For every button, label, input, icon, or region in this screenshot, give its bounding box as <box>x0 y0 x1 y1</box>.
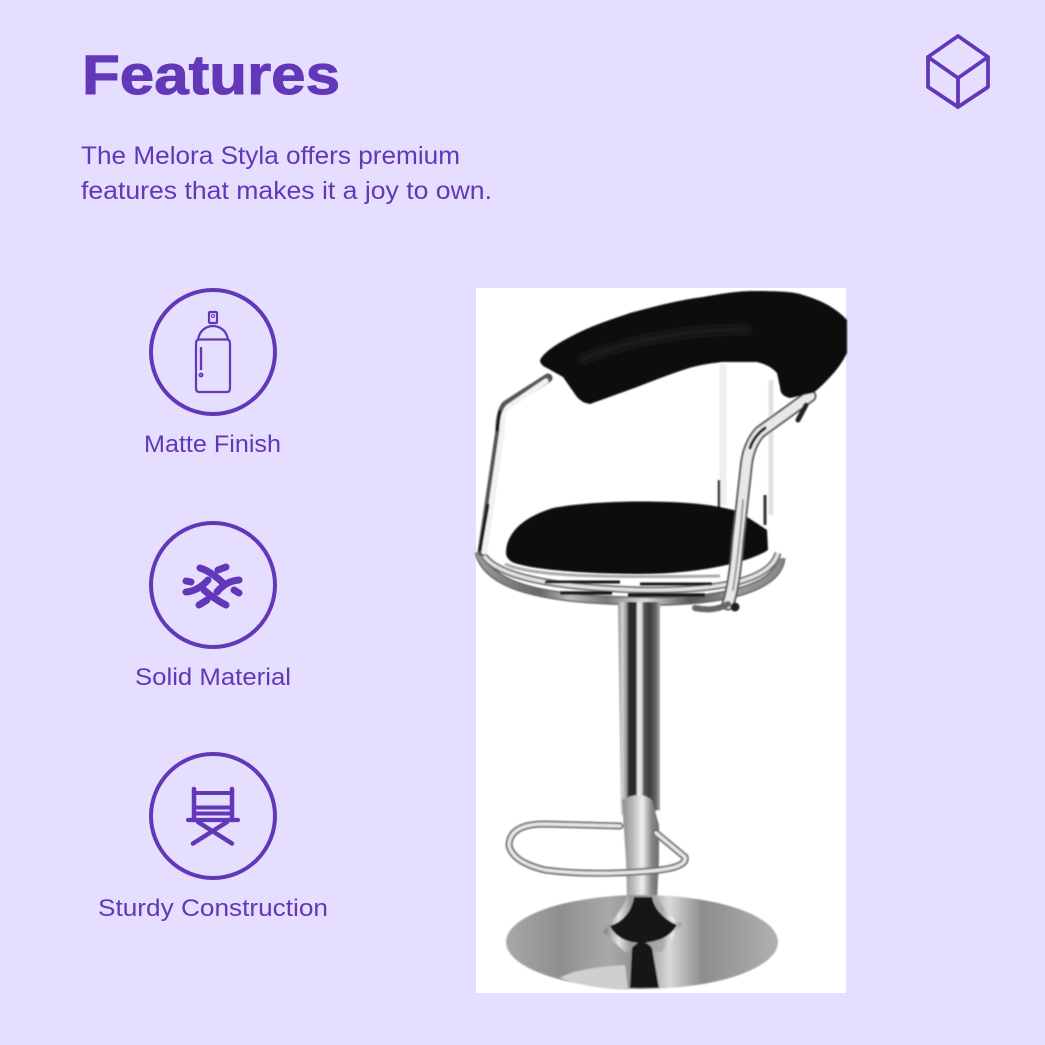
lower pole <box>622 795 659 900</box>
title: Features <box>82 43 340 106</box>
icon: cube <box>928 36 988 107</box>
icon: folding chair <box>151 754 275 878</box>
icon: woven fabric <box>151 523 275 647</box>
feature: matte finish <box>144 290 281 458</box>
feature: sturdy construction <box>98 754 328 922</box>
intro text <box>81 142 492 205</box>
base highlight <box>560 965 628 990</box>
intro text: features that makes it a joy to own. <box>81 177 492 205</box>
product photo: bar stool <box>476 288 847 993</box>
icon: spray can <box>151 290 275 414</box>
label: sturdy construction: Sturdy Construction <box>98 895 328 922</box>
feature: solid material <box>135 523 291 691</box>
cone shadow <box>610 897 677 943</box>
central pole <box>618 602 660 815</box>
round base <box>506 895 778 989</box>
lower base column <box>630 942 659 988</box>
footrest ring <box>509 824 685 873</box>
left armrest tube <box>480 378 548 552</box>
label: matte finish: Matte Finish <box>144 431 281 458</box>
seat ring <box>479 552 781 601</box>
back support tubes <box>719 364 771 525</box>
base cone <box>603 896 682 952</box>
seat cushion <box>506 501 768 574</box>
backrest cushion <box>540 291 847 404</box>
intro text: The Melora Styla offers premium <box>81 142 460 170</box>
label: solid material: Solid Material <box>135 664 291 691</box>
right armrest tube <box>695 396 810 612</box>
